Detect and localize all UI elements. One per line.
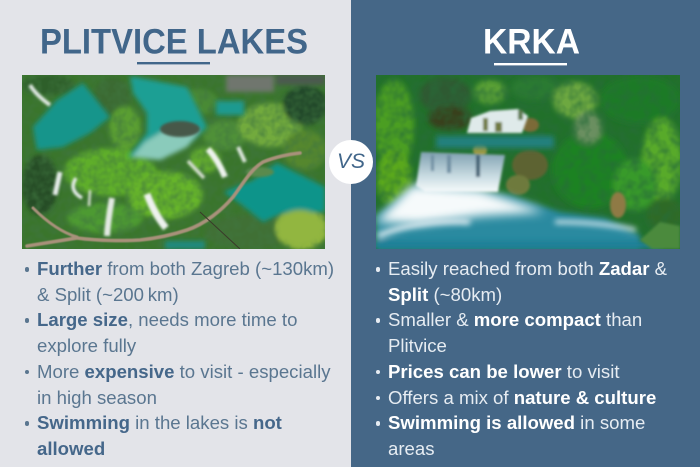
badge: vs: VS [337,150,365,173]
text block: krka bullet list: Easily reached from both Zadar & [388,258,667,279]
text block: plitvice bullet list: allowed [37,438,105,459]
text block: plitvice bullet list [25,258,334,459]
text block: krka bullet list: Prices can be lower to visit [388,361,620,382]
photo: plitvice lakes aerial view [22,75,325,249]
panel: krka background [351,0,700,467]
text block: plitvice bullet list: Swimming in the lakes is not [37,412,282,433]
text block: krka bullet list [376,258,667,459]
text block: krka bullet list: areas [388,438,435,459]
title: plitvice lakes: PLITVICE LAKES [40,22,308,62]
text block: krka bullet list: Swimming is allowed in some [388,412,645,433]
text block: plitvice bullet list: in high season [37,387,157,408]
text block: krka bullet list: Offers a mix of nature & culture [388,387,656,408]
text block: plitvice bullet list: explore fully [37,335,136,356]
text block: krka bullet list: Smaller & more compact than [388,309,642,330]
text block: krka bullet list: Split (~80km) [388,284,502,305]
panel: plitvice background [0,0,351,467]
badge: vs [329,140,373,184]
title: krka: KRKA [483,22,580,62]
text block: krka bullet list: Plitvice [388,335,447,356]
text block: plitvice bullet list: Further from both Zagreb (~130km) [37,258,334,279]
text block: plitvice bullet list: & Split (~200 km) [37,284,179,305]
text block: plitvice bullet list: Large size, needs more time to [37,309,297,330]
photo: krka waterfalls [376,75,680,249]
text block: plitvice bullet list: More expensive to visit - especially [37,361,331,382]
